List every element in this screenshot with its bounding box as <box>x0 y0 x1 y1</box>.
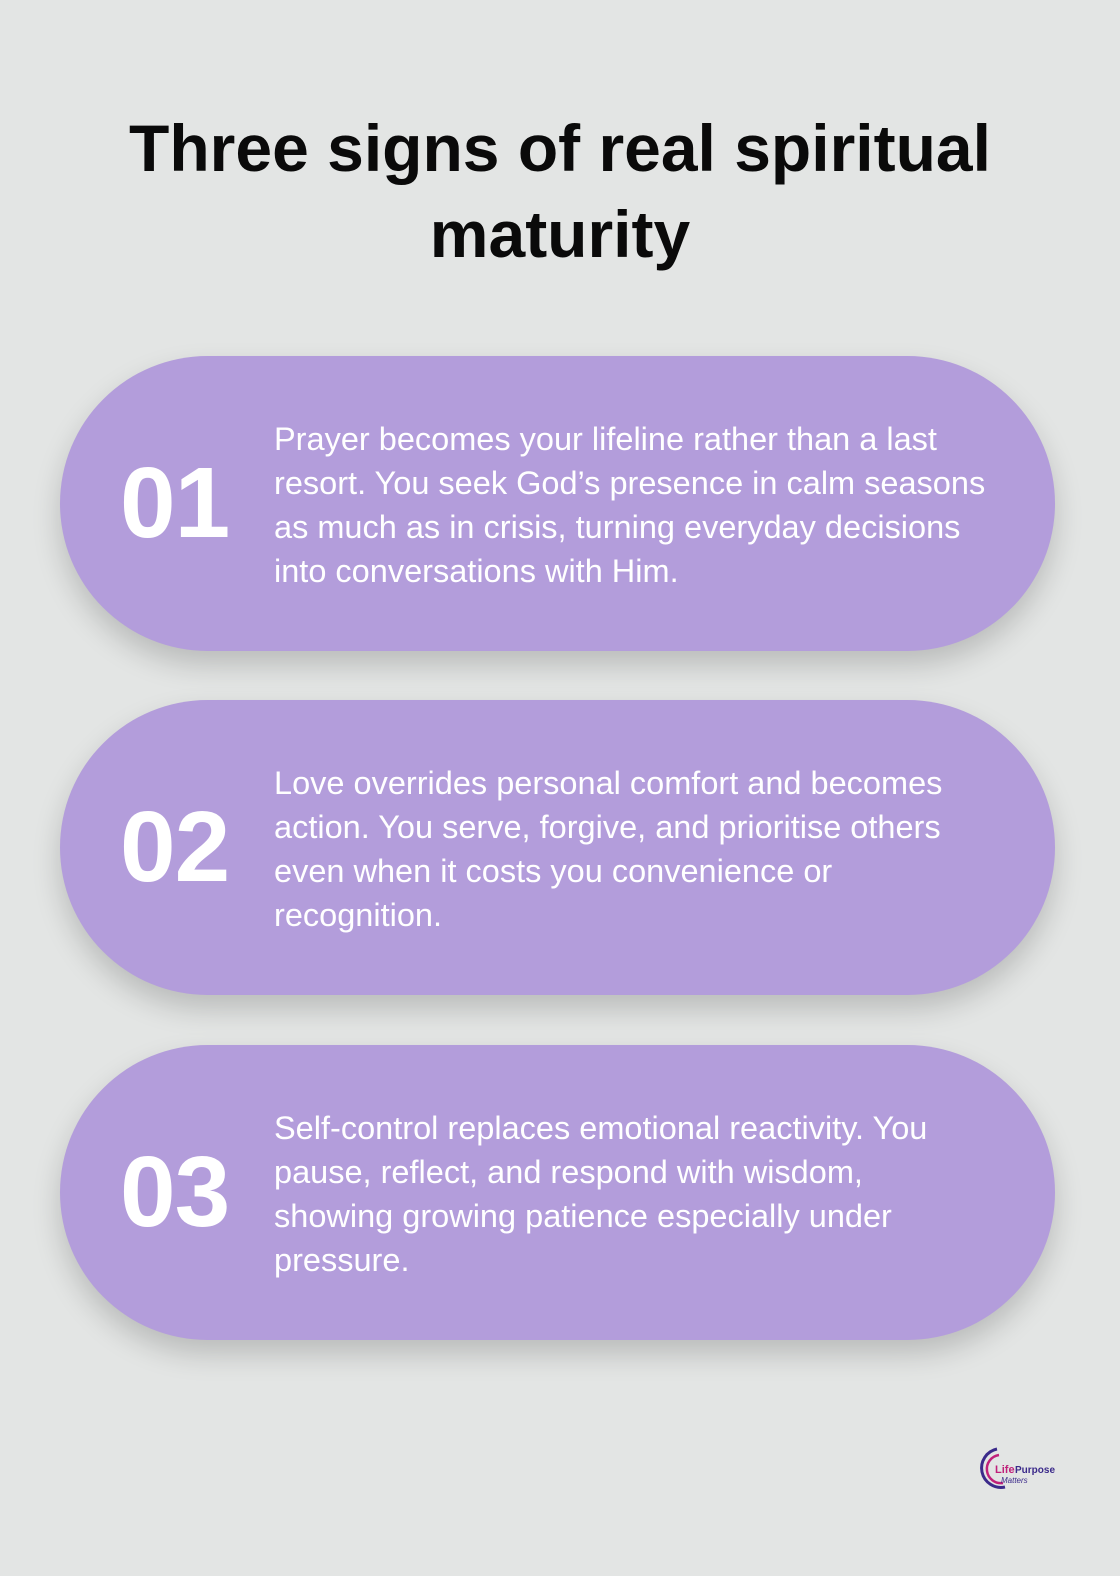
logo: Life <box>995 1464 1015 1476</box>
text 2: action. You serve, forgive, and prioritise others <box>274 809 941 845</box>
text 2: Love overrides personal comfort and becomes <box>274 765 942 801</box>
logo: Purpose <box>1015 1465 1055 1476</box>
text 2: even when it costs you convenience or <box>274 853 832 889</box>
text 3: pressure. <box>274 1242 409 1278</box>
title <box>129 111 991 271</box>
text 2: recognition. <box>274 897 442 933</box>
title: maturity <box>430 197 690 271</box>
text 1 <box>274 421 985 589</box>
text 1: Prayer becomes your lifeline rather than a last <box>274 421 937 457</box>
text 1: into conversations with Him. <box>274 553 679 589</box>
card 1 <box>60 356 1055 651</box>
logo: Matters <box>1001 1476 1028 1485</box>
text 3 <box>274 1110 927 1278</box>
card 3 <box>60 1045 1055 1340</box>
logo <box>980 1448 1055 1489</box>
text 1: resort. You seek God’s presence in calm seasons <box>274 465 985 501</box>
text 3: pause, reflect, and respond with wisdom, <box>274 1154 863 1190</box>
number 02: 02 <box>120 791 229 903</box>
text 2 <box>274 765 942 933</box>
text 1: as much as in crisis, turning everyday decisions <box>274 509 960 545</box>
text 3: Self-control replaces emotional reactivity. You <box>274 1110 927 1146</box>
number 01: 01 <box>120 447 229 559</box>
title: Three signs of real spiritual <box>129 111 991 185</box>
card 2 <box>60 700 1055 995</box>
text 3: showing growing patience especially under <box>274 1198 892 1234</box>
number 03: 03 <box>120 1136 229 1248</box>
